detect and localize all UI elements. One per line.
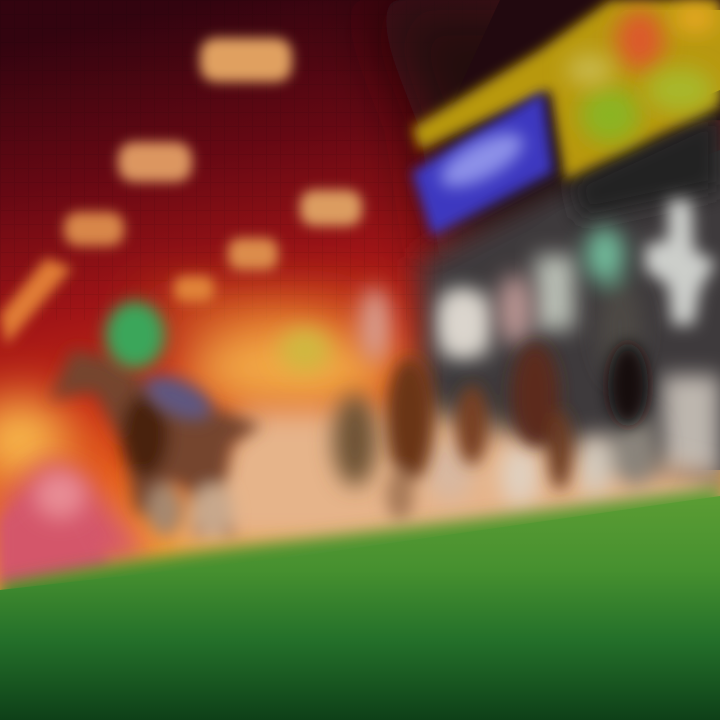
floating coins: golden blurred shapes bbox=[0, 38, 362, 345]
crowd: pink shape at left bbox=[0, 460, 150, 585]
glow: warm haze behind horses bbox=[0, 296, 400, 482]
horse: lead horse and jockey bbox=[50, 301, 262, 536]
horse group: pack of horses bbox=[279, 227, 659, 521]
track: sandy ground bbox=[170, 410, 720, 545]
screen: blue display bbox=[412, 92, 553, 236]
grass: green foreground hill bbox=[0, 488, 720, 720]
billboard: yellow and green sign bbox=[412, 0, 720, 180]
grandstand: dark background on the right bbox=[420, 110, 720, 500]
